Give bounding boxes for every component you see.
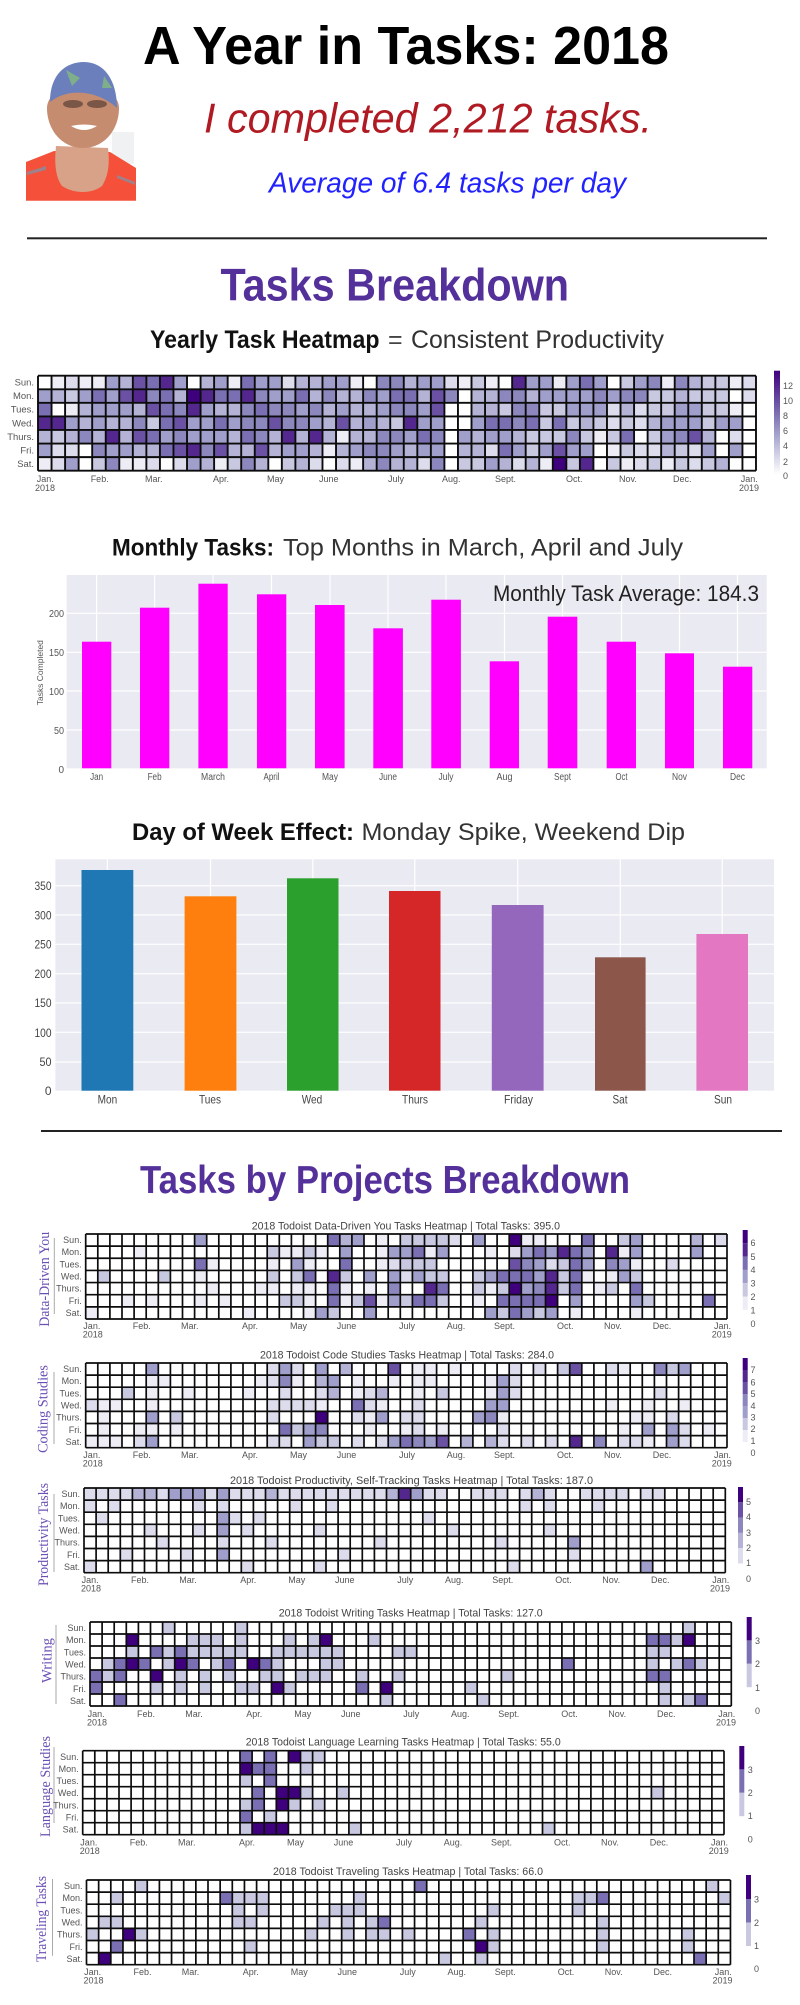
panel: Productivity Tasks heatmap: Sat. (64, 1562, 80, 1572)
panel: Productivity Tasks heatmap: Feb. (131, 1575, 149, 1585)
panel: Traveling Tasks heatmap: July (400, 1967, 416, 1977)
panel: Traveling Tasks heatmap: 2018 Todoist Traveling Tasks Heatmap | Total Tasks: 66.0 (273, 1866, 543, 1878)
panel: Traveling Tasks heatmap: Sun. (64, 1881, 82, 1891)
subheading: yearly heatmap (150, 326, 664, 354)
panel: Coding Studies heatmap: Jan. (714, 1450, 731, 1460)
yearly task heatmap (7, 376, 759, 493)
panel: Traveling Tasks heatmap: Nov. (605, 1967, 623, 1977)
panel: Writing heatmap: Oct. (561, 1709, 578, 1719)
bar chart: monthly tasks: May (322, 772, 338, 783)
panel: Data-Driven You heatmap: 5 (750, 1252, 756, 1262)
panel: Data-Driven You heatmap: Mar. (181, 1321, 199, 1331)
title: A Year in Tasks: 2018 (143, 16, 669, 76)
panel: Writing heatmap: Mar. (185, 1709, 203, 1719)
panel: Language Studies heatmap: Mar. (178, 1838, 196, 1848)
yearly task heatmap: Thurs. (7, 432, 34, 443)
panel: Writing heatmap: Jan. (718, 1709, 735, 1719)
yearly task heatmap: Oct. (566, 474, 583, 484)
bar chart: monthly tasks: 100 (49, 687, 64, 698)
bar chart: day of week: Mon (98, 1092, 117, 1106)
panel: Writing heatmap: 0 (755, 1706, 760, 1716)
bar chart: monthly tasks: 50 (54, 726, 64, 737)
yearly task heatmap: 2018 (35, 483, 55, 493)
bar chart: day of week: Wed (302, 1092, 322, 1106)
panel: Data-Driven You heatmap: Jan. (714, 1321, 731, 1331)
yearly task heatmap: Nov. (619, 474, 637, 484)
panel: Coding Studies heatmap: Wed. (61, 1400, 82, 1410)
panel: Data-Driven You heatmap: Wed. (61, 1272, 82, 1282)
panel: Coding Studies heatmap: Sept. (494, 1450, 515, 1460)
subheading: day of week effect (132, 819, 685, 846)
panel: Language Studies heatmap: Dec. (650, 1838, 668, 1848)
heading: Tasks Breakdown: Tasks Breakdown (220, 260, 569, 311)
panel: Language Studies heatmap: Tues. (57, 1776, 79, 1786)
panel: Coding Studies heatmap: 1 (750, 1436, 756, 1446)
panel: Coding Studies heatmap: 7 (750, 1365, 756, 1375)
panel: Writing heatmap: Wed. (65, 1660, 86, 1670)
panel: Traveling Tasks heatmap: Sat. (66, 1954, 82, 1964)
bar chart: monthly tasks: 200 (49, 609, 64, 620)
heading: Tasks by Projects Breakdown: Tasks by Projects Breakdown (140, 1159, 630, 1202)
panel: Coding Studies heatmap: Fri. (69, 1425, 82, 1435)
panel: Productivity Tasks heatmap: Nov. (602, 1575, 620, 1585)
panel: Coding Studies heatmap: May (290, 1450, 308, 1460)
panel: Writing heatmap: Sun. (67, 1623, 86, 1633)
panel: Language Studies heatmap: Nov. (601, 1838, 619, 1848)
yearly task heatmap: Fri. (20, 445, 34, 456)
panel: Data-Driven You heatmap: Sun. (63, 1235, 82, 1245)
panel: Coding Studies heatmap: 4 (750, 1401, 756, 1411)
bar chart: monthly tasks: Sept (554, 772, 571, 783)
bar chart: day of week: Thurs (402, 1092, 428, 1106)
panel: Traveling Tasks heatmap: 0 (754, 1964, 759, 1974)
panel: Coding Studies heatmap: Tues. (60, 1388, 82, 1398)
panel: Language Studies heatmap: Sun. (60, 1752, 79, 1762)
panel: Productivity Tasks heatmap: Jan. (82, 1575, 99, 1585)
panel: Data-Driven You heatmap: Apr. (242, 1321, 258, 1331)
bar chart: monthly tasks: Nov (672, 772, 687, 783)
panel: Productivity Tasks heatmap: 2018 (81, 1584, 101, 1594)
yearly task heatmap: Jan. (741, 474, 758, 484)
panel: Coding Studies heatmap: 2 (750, 1424, 756, 1434)
panel: Coding Studies heatmap: Nov. (604, 1450, 622, 1460)
panel: Productivity Tasks heatmap: Tues. (58, 1513, 80, 1523)
panel: Language Studies heatmap: June (334, 1838, 353, 1848)
panel: Traveling Tasks heatmap (34, 1866, 759, 1986)
panel: Coding Studies heatmap: Apr. (242, 1450, 258, 1460)
panel: Writing heatmap: Nov. (608, 1709, 626, 1719)
yearly task heatmap: Wed. (12, 418, 34, 429)
panel: Data-Driven You heatmap: Oct. (557, 1321, 574, 1331)
panel: Traveling Tasks heatmap: Fri. (70, 1942, 82, 1952)
panel: Writing heatmap: Apr. (246, 1709, 262, 1719)
yearly task heatmap: Sat. (17, 459, 34, 470)
panel: Language Studies heatmap: July (396, 1838, 413, 1848)
colorbar: yearly heatmap: 2 (783, 457, 788, 467)
panel: Coding Studies heatmap: Aug. (447, 1450, 465, 1460)
panel: Coding Studies heatmap: Sat. (66, 1437, 82, 1447)
panel: Coding Studies heatmap: Coding Studies (36, 1365, 52, 1453)
panel: Language Studies heatmap: 2 (748, 1788, 753, 1798)
panel: Data-Driven You heatmap: Dec. (653, 1321, 671, 1331)
panel: Writing heatmap (40, 1608, 760, 1728)
panel: Productivity Tasks heatmap: Mon. (60, 1501, 80, 1511)
panel: Productivity Tasks heatmap: Thurs. (54, 1538, 80, 1548)
yearly task heatmap: Jan. (37, 474, 54, 484)
bar chart: monthly tasks: April (264, 772, 280, 783)
panel: Writing heatmap: Thurs. (60, 1672, 86, 1682)
bar chart: day of week: 350 (34, 879, 52, 893)
panel: Writing heatmap: 2018 (87, 1718, 107, 1728)
subheading: monthly tasks: Monthly Tasks: (112, 535, 274, 562)
panel: Productivity Tasks heatmap: 3 (746, 1528, 751, 1538)
panel: Traveling Tasks heatmap: June (338, 1967, 357, 1977)
yearly task heatmap: June (319, 474, 339, 484)
yearly task heatmap: Feb. (91, 474, 109, 484)
panel: Traveling Tasks heatmap: Dec. (654, 1967, 672, 1977)
yearly task heatmap: Dec. (673, 474, 692, 484)
panel: Coding Studies heatmap: Thurs. (56, 1413, 82, 1423)
panel: Language Studies heatmap: Jan. (711, 1838, 728, 1848)
panel: Productivity Tasks heatmap: 2018 Todoist Productivity, Self-Tracking Tasks Heatmap | Total Tasks: 187.0 (230, 1475, 593, 1487)
panel: Language Studies heatmap: Fri. (66, 1812, 79, 1822)
panel: Writing heatmap: Dec. (657, 1709, 676, 1719)
panel: Coding Studies heatmap: 6 (750, 1378, 756, 1388)
panel: Productivity Tasks heatmap: 4 (746, 1512, 751, 1522)
icon: portrait photo (26, 62, 136, 201)
panel: Writing heatmap: 2 (755, 1659, 760, 1669)
yearly task heatmap: Tues. (11, 405, 34, 416)
panel: Data-Driven You heatmap: 2018 (83, 1330, 103, 1340)
colorbar: yearly heatmap: 4 (783, 441, 788, 451)
panel: Productivity Tasks heatmap: 1 (746, 1558, 751, 1568)
panel: Data-Driven You heatmap: Aug. (447, 1321, 465, 1331)
panel: Writing heatmap: 2018 Todoist Writing Tasks Heatmap | Total Tasks: 127.0 (279, 1608, 543, 1620)
panel: Data-Driven You heatmap: 1 (750, 1306, 756, 1316)
panel: Language Studies heatmap (38, 1736, 753, 1856)
subheading: yearly heatmap: = (388, 326, 403, 354)
panel: Data-Driven You heatmap: June (337, 1321, 356, 1331)
yearly task heatmap: Apr. (213, 474, 229, 484)
bar chart: monthly tasks: June (379, 772, 397, 783)
headline: tasks completed: I completed 2,212 tasks. (204, 95, 652, 142)
panel: Language Studies heatmap: Feb. (130, 1838, 148, 1848)
panel: Productivity Tasks heatmap: 2019 (710, 1584, 730, 1594)
panel: Productivity Tasks heatmap: Sun. (61, 1489, 80, 1499)
panel: Language Studies heatmap: Wed. (58, 1788, 79, 1798)
panel: Data-Driven You heatmap: 2 (750, 1292, 756, 1302)
panel: Language Studies heatmap: Thurs. (53, 1800, 79, 1810)
panel: Traveling Tasks heatmap: 2019 (712, 1976, 733, 1986)
panel: Productivity Tasks heatmap: June (335, 1575, 355, 1585)
panel: Productivity Tasks heatmap: Dec. (651, 1575, 670, 1585)
colorbar: yearly heatmap (774, 371, 793, 481)
panel: Traveling Tasks heatmap: Thurs. (57, 1930, 82, 1940)
panel: Productivity Tasks heatmap: Jan. (712, 1575, 729, 1585)
panel: Data-Driven You heatmap: May (290, 1321, 308, 1331)
panel: Traveling Tasks heatmap: 3 (754, 1894, 759, 1904)
panel: Productivity Tasks heatmap: Sept. (492, 1575, 513, 1585)
bar chart: monthly tasks: Feb (148, 772, 162, 783)
subheading: yearly heatmap: Consistent Productivity (411, 326, 664, 354)
panel: Data-Driven You heatmap: Sat. (66, 1308, 82, 1318)
panel: Language Studies heatmap: May (287, 1838, 305, 1848)
panel: Productivity Tasks heatmap (36, 1475, 751, 1594)
bar chart: monthly tasks (35, 575, 767, 783)
panel: Productivity Tasks heatmap: Wed. (59, 1526, 80, 1536)
yearly task heatmap: July (388, 474, 405, 484)
panel: Data-Driven You heatmap (37, 1220, 756, 1340)
panel: Traveling Tasks heatmap: Jan. (715, 1967, 732, 1977)
panel: Coding Studies heatmap: Oct. (557, 1450, 574, 1460)
yearly task heatmap: May (267, 474, 285, 484)
panel: Language Studies heatmap: Oct. (554, 1838, 571, 1848)
bar chart: monthly tasks: July (438, 772, 454, 783)
panel: Coding Studies heatmap: Jan. (83, 1450, 100, 1460)
bar chart: day of week: 300 (34, 908, 52, 922)
panel: Writing heatmap: July (403, 1709, 420, 1719)
panel: Coding Studies heatmap: 2018 Todoist Code Studies Tasks Heatmap | Total Tasks: 284.0 (260, 1350, 554, 1362)
colorbar: yearly heatmap: 8 (783, 411, 788, 421)
panel: Traveling Tasks heatmap: Feb. (134, 1967, 152, 1977)
panel: Language Studies heatmap: 0 (748, 1834, 753, 1844)
panel: Coding Studies heatmap: Feb. (133, 1450, 151, 1460)
panel: Writing heatmap: Tues. (64, 1647, 86, 1657)
panel: Data-Driven You heatmap: Mon. (62, 1247, 82, 1257)
bar chart: day of week: Friday (504, 1092, 533, 1106)
panel: Productivity Tasks heatmap: 0 (746, 1574, 751, 1584)
panel: Traveling Tasks heatmap: Aug. (448, 1967, 466, 1977)
panel: Data-Driven You heatmap: 2018 Todoist Data-Driven You Tasks Heatmap | Total Tasks: 395.0 (252, 1220, 560, 1232)
bar chart: day of week: Tues (199, 1092, 221, 1106)
panel: Coding Studies heatmap: 0 (750, 1448, 756, 1458)
subheading: day of week effect: Monday Spike, Weekend Dip (362, 819, 685, 846)
panel: Writing heatmap: Aug. (451, 1709, 470, 1719)
bar chart: monthly tasks: Tasks Completed (35, 640, 45, 705)
panel: Language Studies heatmap: Language Studies (38, 1736, 54, 1837)
panel: Traveling Tasks heatmap: Wed. (62, 1918, 82, 1928)
colorbar: yearly heatmap: 10 (783, 396, 793, 406)
panel: Traveling Tasks heatmap: Traveling Tasks (34, 1876, 50, 1962)
panel: Data-Driven You heatmap: Sept. (494, 1321, 515, 1331)
panel: Writing heatmap: Sept. (498, 1709, 519, 1719)
panel: Writing heatmap: 3 (755, 1636, 760, 1646)
panel: Writing heatmap: 2019 (716, 1718, 736, 1728)
panel: Traveling Tasks heatmap: May (291, 1967, 308, 1977)
panel: Productivity Tasks heatmap: Oct. (555, 1575, 572, 1585)
panel: Coding Studies heatmap: Mon. (62, 1376, 82, 1386)
panel: Traveling Tasks heatmap: Sept. (495, 1967, 516, 1977)
panel: Data-Driven You heatmap: July (399, 1321, 416, 1331)
panel: Writing heatmap: 1 (755, 1683, 760, 1693)
panel: Data-Driven You heatmap: Jan. (83, 1321, 100, 1331)
panel: Coding Studies heatmap: 2018 (83, 1458, 103, 1468)
panel: Data-Driven You heatmap: Thurs. (56, 1284, 82, 1294)
subheading: yearly heatmap: Yearly Task Heatmap (150, 326, 380, 354)
panel: Data-Driven You heatmap: 4 (750, 1265, 756, 1275)
panel: Data-Driven You heatmap: 3 (750, 1278, 756, 1288)
yearly task heatmap: 2019 (739, 483, 759, 493)
bar chart: monthly tasks: Jan (90, 772, 103, 783)
bar chart: day of week (34, 859, 774, 1106)
callout: monthly average: Monthly Task Average: 184.3 (493, 581, 759, 606)
panel: Traveling Tasks heatmap: Jan. (84, 1967, 101, 1977)
panel: Language Studies heatmap: Sept. (491, 1838, 512, 1848)
bar chart: monthly tasks: 0 (58, 765, 64, 776)
panel: Productivity Tasks heatmap: 5 (746, 1497, 751, 1507)
yearly task heatmap: Mon. (13, 391, 34, 402)
panel: Writing heatmap: June (341, 1709, 361, 1719)
panel: Coding Studies heatmap: Mar. (181, 1450, 199, 1460)
subheading: monthly tasks: Top Months in March, April and July (283, 535, 683, 562)
panel: Language Studies heatmap: Apr. (239, 1838, 255, 1848)
panel: Writing heatmap: Mon. (66, 1635, 86, 1645)
panel: Writing heatmap: Fri. (73, 1684, 86, 1694)
panel: Language Studies heatmap: Mon. (59, 1764, 79, 1774)
panel: Data-Driven You heatmap: Feb. (133, 1321, 151, 1331)
subheading: day of week effect: Day of Week Effect: (132, 819, 354, 846)
bar chart: day of week: 0 (45, 1084, 52, 1098)
panel: Data-Driven You heatmap: 6 (750, 1238, 756, 1248)
bar chart: day of week: Sun (714, 1092, 732, 1106)
panel: Traveling Tasks heatmap: 2018 (84, 1976, 104, 1986)
panel: Writing heatmap: May (294, 1709, 312, 1719)
colorbar: yearly heatmap: 12 (783, 381, 793, 391)
subheading: monthly tasks (112, 535, 683, 562)
bar chart: day of week: 50 (40, 1055, 52, 1069)
bar chart: monthly tasks: Dec (730, 772, 745, 783)
panel: Language Studies heatmap: 2019 (709, 1846, 729, 1856)
yearly task heatmap: Sept. (495, 474, 516, 484)
panel: Language Studies heatmap: 3 (748, 1765, 753, 1775)
panel: Language Studies heatmap: Sat. (63, 1825, 79, 1835)
panel: Coding Studies heatmap (36, 1350, 756, 1468)
panel: Coding Studies heatmap: July (399, 1450, 416, 1460)
bar chart: day of week: 100 (34, 1026, 52, 1040)
panel: Coding Studies heatmap: 2019 (712, 1458, 732, 1468)
panel: Language Studies heatmap: Jan. (80, 1838, 97, 1848)
panel: Traveling Tasks heatmap: 1 (754, 1941, 759, 1951)
panel: Productivity Tasks heatmap: Mar. (179, 1575, 197, 1585)
yearly task heatmap: Mar. (145, 474, 163, 484)
bar chart: day of week: 250 (34, 938, 52, 952)
panel: Data-Driven You heatmap: 0 (750, 1319, 756, 1329)
panel: Productivity Tasks heatmap: May (288, 1575, 306, 1585)
panel: Productivity Tasks heatmap: Aug. (445, 1575, 464, 1585)
panel: Data-Driven You heatmap: Data-Driven You (37, 1231, 53, 1327)
panel: Productivity Tasks heatmap: July (397, 1575, 414, 1585)
panel: Writing heatmap: Jan. (88, 1709, 105, 1719)
panel: Productivity Tasks heatmap: 2 (746, 1543, 751, 1553)
panel: Traveling Tasks heatmap: 2 (754, 1918, 759, 1928)
panel: Coding Studies heatmap: Sun. (63, 1364, 82, 1374)
panel: Coding Studies heatmap: Dec. (653, 1450, 671, 1460)
panel: Traveling Tasks heatmap: Mar. (182, 1967, 199, 1977)
bar chart: monthly tasks: Oct (616, 772, 628, 783)
panel: Writing heatmap: Sat. (70, 1696, 86, 1706)
bar chart: monthly tasks: Aug (496, 772, 512, 783)
bar chart: monthly tasks: March (201, 772, 225, 783)
panel: Coding Studies heatmap: June (337, 1450, 356, 1460)
bar chart: day of week: 200 (34, 967, 52, 981)
panel: Data-Driven You heatmap: 2019 (712, 1330, 732, 1340)
colorbar: yearly heatmap: 6 (783, 426, 788, 436)
panel: Data-Driven You heatmap: Fri. (69, 1296, 82, 1306)
panel: Productivity Tasks heatmap: Productivity Tasks (36, 1483, 52, 1586)
bar chart: day of week: Sat (612, 1092, 628, 1106)
panel: Traveling Tasks heatmap: Oct. (558, 1967, 574, 1977)
panel: Writing heatmap: Writing (40, 1638, 56, 1683)
panel: Language Studies heatmap: 2018 (80, 1846, 100, 1856)
panel: Traveling Tasks heatmap: Apr. (243, 1967, 259, 1977)
panel: Data-Driven You heatmap: Tues. (60, 1259, 82, 1269)
panel: Data-Driven You heatmap: Nov. (604, 1321, 622, 1331)
colorbar: yearly heatmap: 0 (783, 471, 788, 481)
panel: Coding Studies heatmap: 5 (750, 1389, 756, 1399)
panel: Productivity Tasks heatmap: Apr. (240, 1575, 256, 1585)
bar chart: monthly tasks: 150 (49, 648, 64, 659)
yearly task heatmap: Aug. (442, 474, 461, 484)
yearly task heatmap: Sun. (15, 378, 34, 389)
subhead: average per day: Average of 6.4 tasks per day (267, 168, 627, 200)
bar chart: day of week: 150 (34, 996, 52, 1010)
panel: Language Studies heatmap: 1 (748, 1811, 753, 1821)
panel: Coding Studies heatmap: 3 (750, 1412, 756, 1422)
panel: Traveling Tasks heatmap: Tues. (60, 1905, 82, 1915)
panel: Language Studies heatmap: 2018 Todoist Language Learning Tasks Heatmap | Total Tasks: 55.0 (246, 1736, 561, 1748)
panel: Traveling Tasks heatmap: Mon. (62, 1893, 82, 1903)
panel: Language Studies heatmap: Aug. (444, 1838, 462, 1848)
panel: Productivity Tasks heatmap: Fri. (67, 1550, 80, 1560)
panel: Writing heatmap: Feb. (137, 1709, 155, 1719)
